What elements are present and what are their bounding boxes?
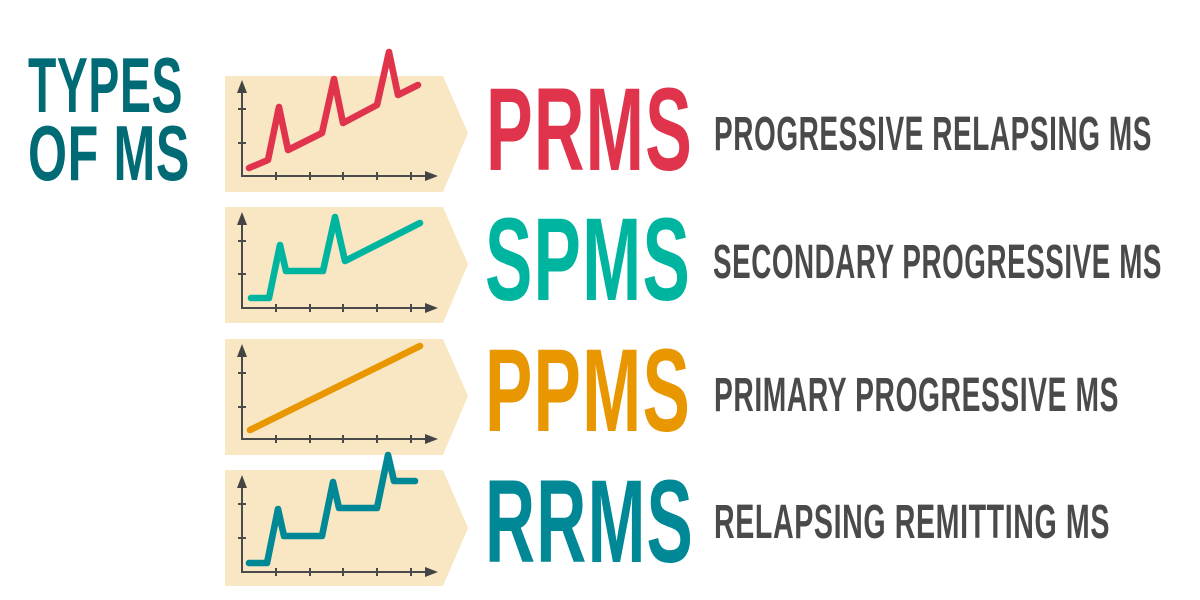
title: TYPES	[28, 41, 183, 129]
title	[28, 41, 190, 197]
axes: RRMS chart	[237, 475, 438, 577]
acronym: PRMS: PRMS	[486, 64, 693, 196]
line: PPMS trend	[250, 346, 420, 430]
line: RRMS trend	[249, 455, 415, 563]
title: OF MS	[28, 109, 190, 197]
panel: RRMS row	[225, 455, 1110, 588]
arrow panel: PPMS	[225, 339, 468, 455]
panel: SPMS row	[225, 194, 1162, 326]
line: SPMS trend	[251, 217, 420, 298]
arrow panel: PRMS	[225, 76, 468, 192]
axes: SPMS chart	[237, 212, 438, 313]
line: PRMS trend	[249, 52, 418, 168]
arrow panel: RRMS	[225, 470, 468, 586]
acronym: RRMS: RRMS	[485, 456, 694, 588]
axes: PRMS chart	[237, 80, 438, 181]
panel: PRMS row	[225, 52, 1152, 196]
arrow panel: SPMS	[225, 207, 468, 323]
panel: PPMS row	[225, 325, 1119, 457]
acronym: PPMS: PPMS	[485, 325, 691, 457]
acronym: SPMS: SPMS	[485, 194, 691, 326]
axes: PPMS chart	[237, 344, 438, 444]
